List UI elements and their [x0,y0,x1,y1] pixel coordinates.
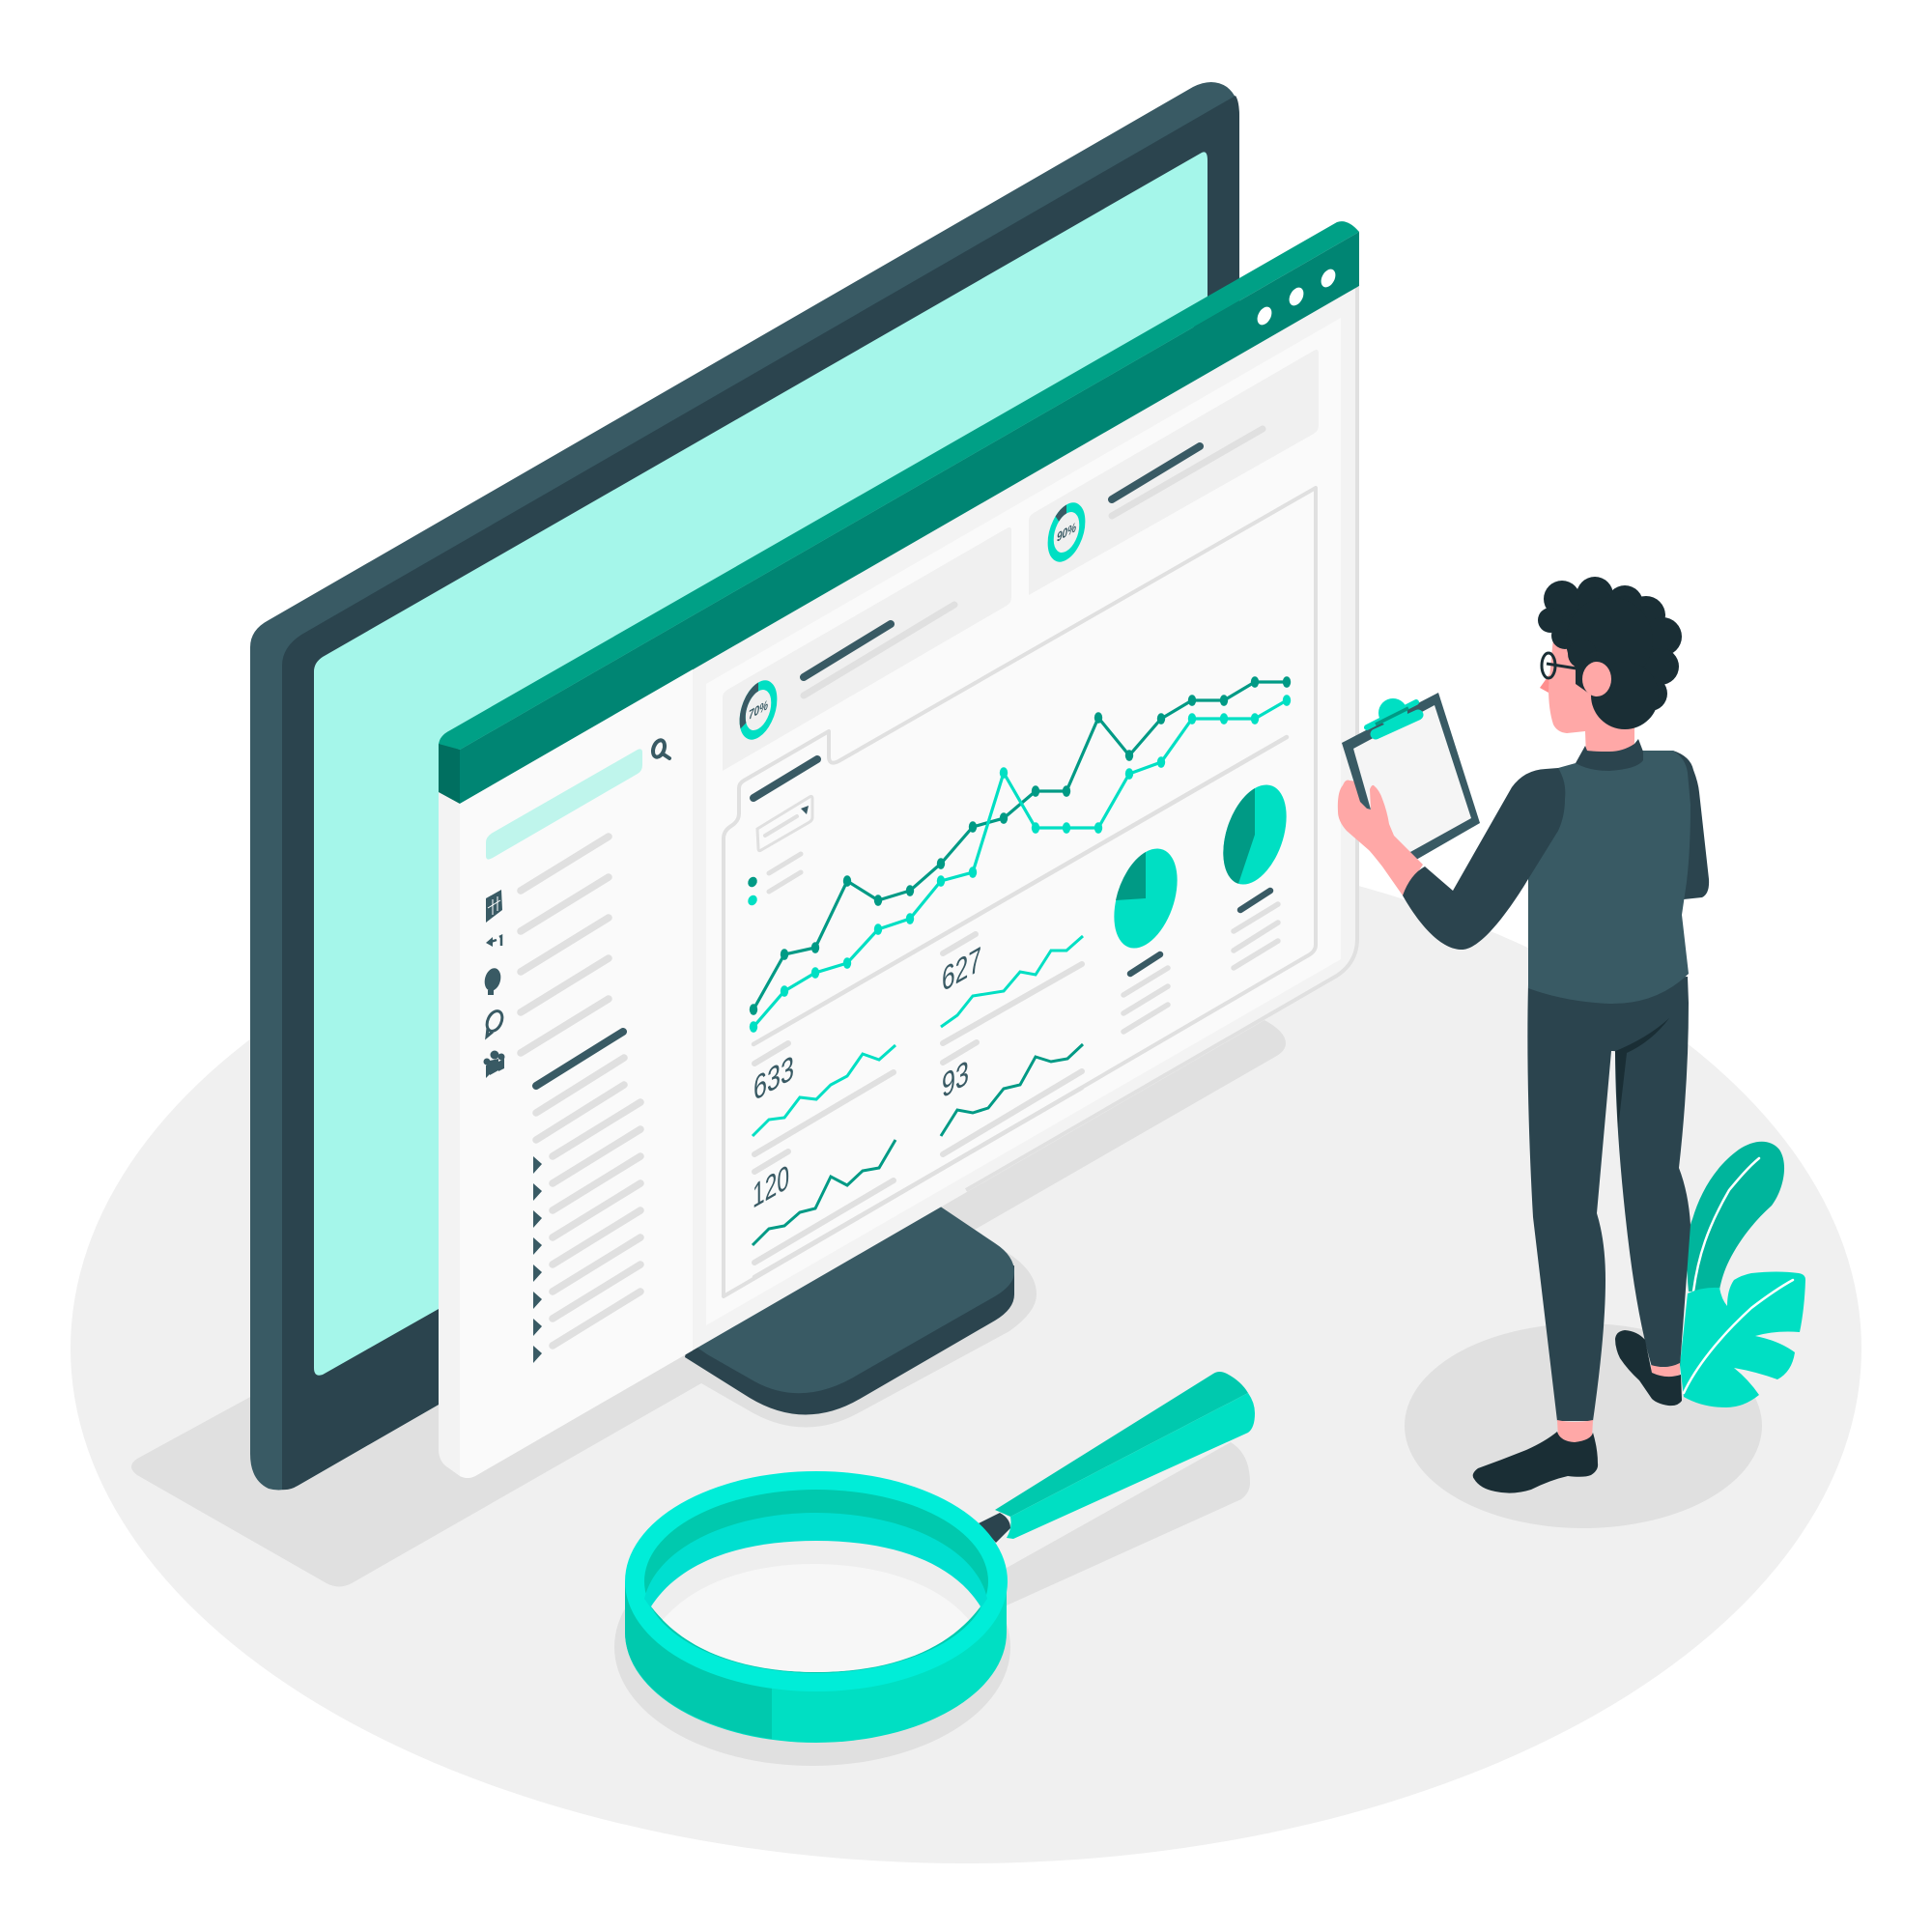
pie chart two [1223,770,1287,968]
stat 627: 627 [942,940,981,1000]
hand and forearm [1338,781,1423,895]
sidebar [460,669,693,1478]
front shoe [1473,1432,1598,1493]
chart title [753,759,817,798]
line chart [750,676,1291,1033]
progress ring 90% [1044,487,1089,578]
stand base top [676,1206,1014,1393]
window header [439,221,1359,804]
lens rim [625,1471,1008,1691]
front browser window [439,221,1359,1478]
handle connector [979,1513,1010,1543]
back monitor [250,82,1239,1490]
grey rules [753,737,1287,1277]
main content area [706,318,1341,1325]
list arrows [533,1156,542,1363]
series dark [750,676,1291,1015]
stat 633: 633 [753,1048,794,1109]
trouser crease [1613,1018,1669,1128]
progress ring 70% [738,669,779,751]
lens body [625,1581,1007,1743]
neck and face [1548,638,1634,758]
stat 120 [753,1140,895,1245]
person ground shadow [1405,1323,1762,1528]
stat 93 [941,1044,1083,1136]
far arm [1673,751,1709,899]
plant [1680,1142,1805,1407]
magnifying glass [614,1372,1255,1766]
hair [1538,577,1682,729]
sidebar menu lines [521,837,640,1346]
shadows of monitor and stand [131,1020,1286,1586]
series light [750,695,1291,1033]
label 70%: 70% [749,696,768,723]
chart legend [746,854,801,907]
nose [1540,674,1549,693]
torso [1528,751,1690,1004]
search bar [486,749,642,860]
dropdown [757,796,812,851]
handle [995,1372,1255,1539]
icon: speech bubble [484,1009,505,1037]
magnifier shadow [614,1442,1250,1766]
sidebar section heading [536,1032,623,1086]
ear [1582,662,1611,696]
stat 633 [753,1045,895,1136]
stand base rim [685,1265,1014,1414]
monitor frame face [282,96,1239,1490]
monitor stand [676,1206,1014,1414]
icon: arrow [486,936,501,947]
back leaf [1687,1142,1784,1292]
legs [1527,977,1690,1421]
icon: light bulb [482,966,503,995]
person [1338,577,1709,1493]
window control dots [1255,267,1338,327]
lens opening [651,1541,980,1672]
chart panel [724,488,1316,1296]
KPI card 70 percent [723,527,1011,771]
monitor frame side [250,82,1239,1490]
ground ellipse [71,834,1861,1863]
monitor screen [314,152,1208,1376]
lens inner wall [644,1490,988,1673]
search icon [651,739,669,758]
rear shoe [1615,1330,1682,1406]
collar [1576,739,1643,771]
near arm [1403,768,1565,950]
clipboard clip [1367,698,1418,734]
clipboard [1342,693,1480,860]
stat 627 [941,936,1083,1043]
pie chart one [1114,834,1178,1032]
glasses [1542,653,1577,678]
front leaf [1680,1271,1805,1407]
socks [1557,1363,1680,1442]
stat 93: 93 [942,1053,969,1106]
KPI card 90 percent [1029,350,1319,595]
clipboard left bar [1342,743,1371,810]
window body [439,242,1359,1478]
label 90%: 90% [1057,519,1076,545]
stat 120: 120 [753,1158,789,1216]
icon: map grid [486,890,502,923]
icon: people [483,1051,504,1078]
